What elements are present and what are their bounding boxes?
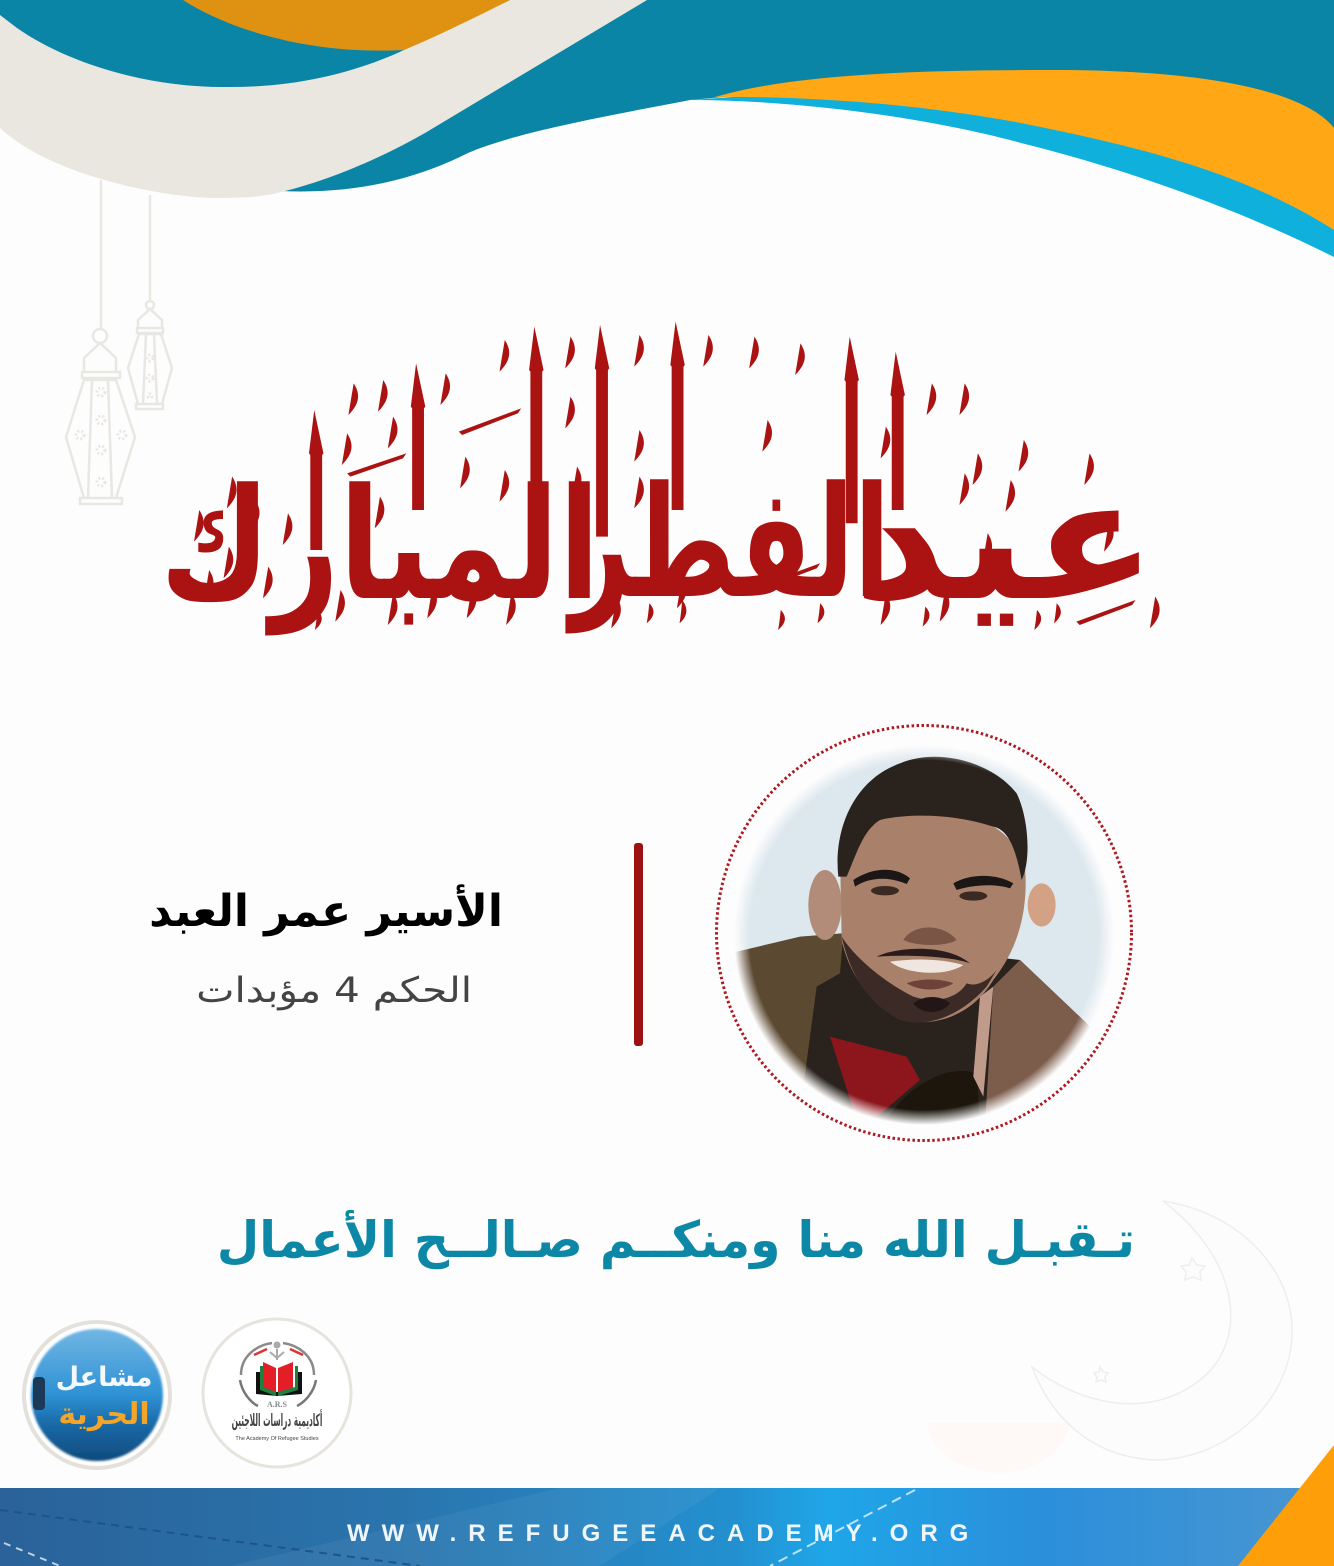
calligraphy word: eid: عيد	[853, 443, 1157, 638]
logo acronym: A.R.S	[267, 1400, 288, 1409]
calligraphy word: al-fitr: الفطر	[565, 455, 890, 633]
top wave banner	[0, 0, 1334, 257]
website address: WWW.REFUGEEACADEMY.ORG	[347, 1520, 980, 1547]
greeting line: تـقبـل الله منا ومنكــم صـالــح الأعمال	[217, 1208, 1135, 1270]
vertical divider	[634, 843, 643, 1046]
calligraphy word: al-mubarak: المبارك	[160, 455, 600, 636]
logo emblem: open book	[240, 1342, 316, 1406]
calligraphy ornaments	[194, 322, 1160, 630]
logo: academy of refugee studies	[203, 1319, 351, 1467]
logo arabic name: أكاديمية دراسات اللاجئين	[232, 1409, 322, 1431]
crescent moon watermark	[927, 1201, 1292, 1473]
portrait photo	[736, 749, 1110, 1124]
logo english name: The Academy Of Refugee Studies	[235, 1436, 319, 1442]
decorative lanterns	[66, 180, 172, 504]
footer bar	[0, 1445, 1334, 1566]
calligraphy title	[160, 322, 1160, 638]
portrait frame	[716, 726, 1132, 1153]
logo text white: مشاعل	[56, 1362, 152, 1393]
logo: mashael al-hurriya	[24, 1322, 170, 1468]
prisoner name: الأسير عمر العبد	[149, 884, 503, 937]
logo text orange: الحرية	[58, 1397, 150, 1432]
sentence: الحكم 4 مؤبدات	[196, 970, 472, 1011]
footer corner triangle	[1238, 1445, 1334, 1566]
